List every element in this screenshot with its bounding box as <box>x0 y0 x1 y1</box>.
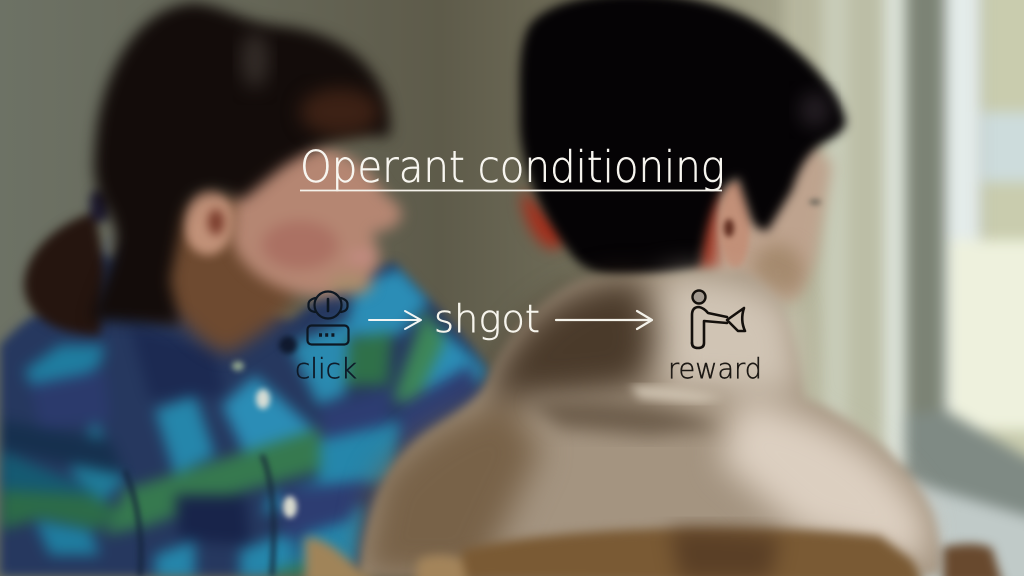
boy sweater <box>360 270 941 576</box>
window and curtain <box>785 0 1024 576</box>
label: shgot: shgot <box>434 297 540 341</box>
boy hair <box>520 0 846 279</box>
title: Operant conditioning <box>300 142 725 193</box>
arrow: shgot to reward <box>556 311 652 329</box>
icon: robot click button <box>308 292 348 344</box>
chair <box>305 528 1003 576</box>
girl ponytail <box>24 190 135 335</box>
girl ear <box>182 185 234 255</box>
label: click: click <box>295 352 357 385</box>
teal bands <box>25 345 105 410</box>
icon: person holding reward horn <box>692 290 745 348</box>
girl figure <box>0 3 500 576</box>
girl hair <box>90 3 390 325</box>
arrow: click to shgot <box>369 311 421 329</box>
boy neck and face <box>522 130 832 300</box>
boy figure <box>520 0 846 300</box>
dark navy <box>320 390 392 436</box>
girl shirt <box>0 230 500 576</box>
girl neck and face <box>130 190 300 353</box>
wall <box>0 0 800 576</box>
label: reward: reward <box>668 352 762 385</box>
green stripes <box>105 428 320 535</box>
